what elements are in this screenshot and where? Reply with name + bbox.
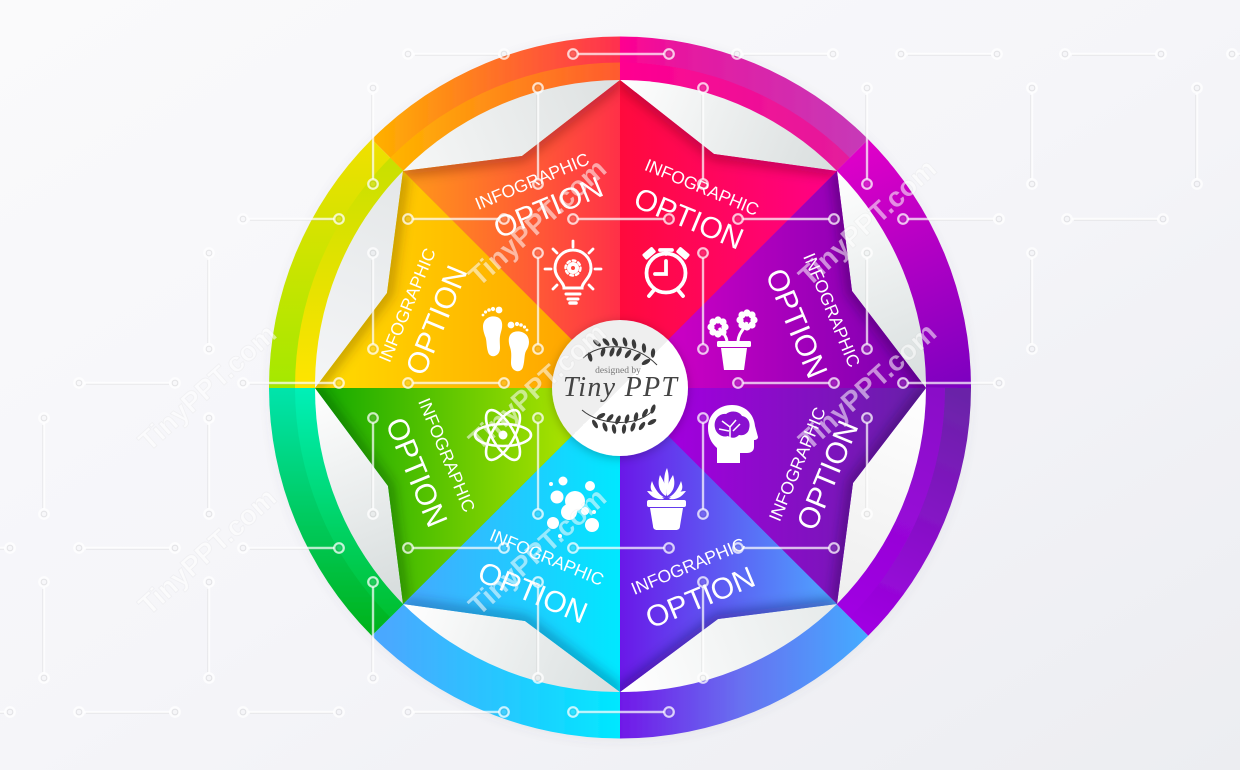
logo: Tiny PPT: Tiny PPT [563, 372, 679, 403]
icon: head with brain [708, 405, 758, 463]
panel: option 8 light bulb [403, 80, 620, 340]
icon: footprints [482, 307, 529, 371]
outer coloured ring [269, 36, 971, 738]
panel: option 6 atom: INFOGRAPHIC [414, 395, 479, 515]
panel: option 7 footprints [315, 171, 572, 388]
logo: designed by: designed by [595, 366, 641, 376]
paper fold gaps between ring and star [315, 80, 926, 692]
watermark text: TinyPPT.com [462, 317, 612, 456]
panel: option 6 atom [315, 388, 572, 604]
panel: option 1 alarm clock: INFOGRAPHIC [642, 155, 762, 220]
panel: option 2 flower pots: OPTION [759, 264, 833, 383]
panel: option 1 alarm clock: OPTION [629, 182, 748, 256]
logo: bottom leaf wreath [582, 404, 657, 434]
panel: option 7 footprints: INFOGRAPHIC [375, 245, 440, 365]
watermark text [132, 153, 942, 621]
panel: option 3 brain head: OPTION [791, 416, 865, 535]
panel: option 2 flower pots [668, 171, 926, 388]
panel: option 4 succulent: OPTION [641, 561, 760, 635]
icon: alarm clock [642, 246, 690, 296]
icon: bubbles [547, 476, 599, 538]
watermark text: TinyPPT.com [792, 153, 942, 292]
panel: option 8 light bulb: OPTION [489, 171, 608, 245]
panel: option 7 footprints: OPTION [400, 261, 474, 380]
icon: atom [475, 405, 531, 465]
panel: option 5 bubbles: INFOGRAPHIC [487, 525, 607, 590]
watermark text: TinyPPT.com [792, 317, 942, 456]
panel: option 4 succulent: INFOGRAPHIC [628, 534, 748, 599]
panel: option 5 bubbles: OPTION [473, 556, 592, 630]
icon: succulent in pot [647, 468, 686, 530]
panel: option 3 brain head [668, 388, 926, 604]
watermark text: TinyPPT.com [132, 482, 282, 621]
logo: top leaf wreath [583, 337, 657, 366]
watermark text: TinyPPT.com [462, 153, 612, 292]
watermark text: TinyPPT.com [462, 482, 612, 621]
watermark text: TinyPPT.com [132, 318, 282, 457]
panel: option 5 bubbles [403, 436, 620, 692]
centre logo badge [552, 320, 688, 456]
panel: option 6 atom: OPTION [379, 413, 453, 532]
panel: option 3 brain head: INFOGRAPHIC [765, 404, 830, 524]
panel: option 1 alarm clock [620, 80, 837, 340]
icon: flower pots [707, 309, 758, 370]
panel: option 8 light bulb: INFOGRAPHIC [472, 149, 592, 214]
panel: option 4 succulent [620, 436, 837, 692]
icon: light bulb with gear [545, 241, 601, 303]
panel: option 2 flower pots: INFOGRAPHIC [799, 250, 864, 370]
